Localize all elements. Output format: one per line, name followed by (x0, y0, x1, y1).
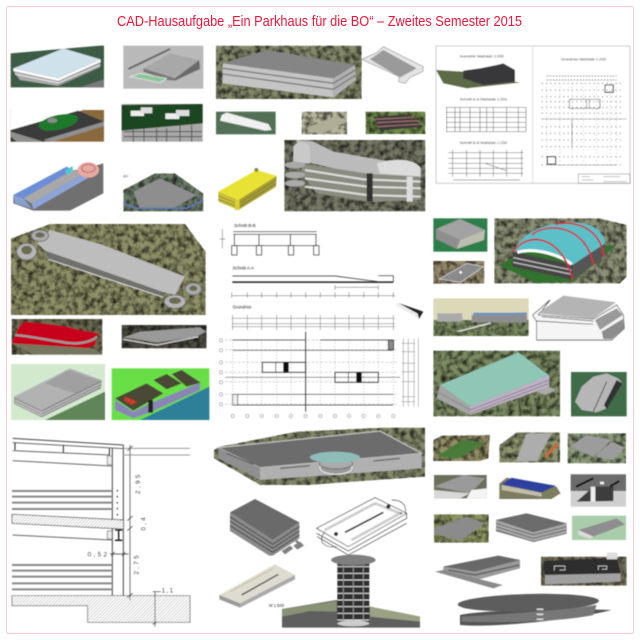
image: yellow building (218, 168, 277, 210)
image: glass dome with red arches (494, 218, 627, 283)
dimension: 0,52: 0,52 (88, 551, 107, 558)
image: grey hall on aerial (434, 514, 489, 543)
heading: section B-B: Schnitt B-B (234, 223, 256, 228)
image: white building on green (216, 112, 276, 134)
image: stacked elliptical decks (457, 592, 612, 626)
image: white and grey terraced building (533, 296, 624, 340)
steel profile (115, 530, 122, 540)
section B-B drawing (220, 229, 319, 255)
image: aerial with pale building (302, 112, 347, 134)
image: red roof building (12, 319, 102, 355)
sheet caption: isometric: Isometrie Maßstab 1:200 (460, 54, 504, 59)
image: green roof on aerial (433, 435, 490, 461)
image: grey building with red roofs (499, 432, 560, 462)
image: dark building on grey (571, 474, 626, 507)
sheet caption: floor plan: Grundriss Maßstab 1:200 (561, 57, 607, 62)
image: grey building on pale green (572, 516, 626, 540)
title block (578, 174, 630, 183)
image: green box model (433, 218, 487, 252)
image: deck with ramp (435, 556, 520, 588)
hatched floor slab (12, 514, 123, 529)
image: small isometric grey slab (362, 47, 423, 83)
image: large curved building with rotundas (284, 140, 425, 211)
image: blue roof building (499, 478, 561, 499)
section A-A drawing (232, 276, 395, 298)
column dots (115, 490, 119, 516)
image: grey roof with white wall (434, 475, 487, 498)
image: blue facade building with pink rotunda (13, 162, 103, 211)
drawing sheet: isometric, sections and floor plan (436, 46, 630, 183)
image: long curved roof on aerial photo (11, 224, 206, 315)
floor plan (225, 315, 418, 412)
image: stacked parking decks (230, 499, 304, 556)
image: green terrain with white blocks above tower (122, 104, 203, 142)
image: flat roof garage with glass rotunda (214, 428, 425, 485)
image: dark roof with white markings (541, 553, 627, 586)
section B drawing (448, 150, 523, 180)
image: small slab on aerial (433, 261, 484, 284)
heading: floor plan: Grundriss (233, 304, 251, 309)
dimension: 0,4: 0,4 (141, 517, 148, 531)
image: oval roof on green (571, 372, 627, 416)
section A drawing (446, 107, 526, 132)
section drawing with dimensions (12, 438, 190, 627)
plan axis markers (219, 339, 395, 418)
dimension: 2,75: 2,75 (133, 555, 140, 575)
hatched foundation (12, 596, 190, 622)
image: round tower with disc roof (282, 555, 420, 628)
image: grey building on light green terrain (11, 364, 105, 420)
image: teal roof garage on aerial (433, 351, 560, 416)
image: building in landscape view (433, 298, 529, 336)
tiny annotations: BO (123, 174, 129, 178)
floor plan drawing (542, 76, 627, 165)
title: CAD-Hausaufgabe „Ein Parkhaus für die BO“ – Zweites Semester 2015 (117, 14, 522, 30)
image: grey model with green deck (123, 46, 203, 89)
dimension lines (110, 445, 161, 627)
image: grey building on aerial plan (123, 173, 203, 211)
technical drawing: sections and floor plan (219, 223, 423, 418)
isometric view of building on terrain (436, 63, 520, 88)
image: large grey parking garage on aerial photo (216, 46, 362, 99)
connection details (107, 456, 112, 539)
image: grey long building on dark ground (122, 325, 207, 348)
sheet caption: section B: Schnitt B-B Maßstab 1:200 (460, 140, 508, 145)
image: wireframe parking plan (317, 498, 407, 555)
image: long beige slab (219, 564, 295, 608)
north arrow (395, 303, 423, 319)
image: dark slab with stripes on aerial (366, 112, 425, 134)
dimension: 1,1: 1,1 (162, 588, 173, 595)
image: open grey multi-storey (496, 513, 567, 542)
scale label: M 1:500 (269, 603, 285, 608)
image: green oval roof on dark slab (11, 110, 104, 142)
heading: section A-A: Schnitt A-A (233, 266, 254, 271)
sheet caption: section A: Schnitt A-A Maßstab 1:200 (460, 97, 508, 102)
image: two grey blocks on aerial (568, 433, 626, 463)
image: white roof parking garage (11, 46, 104, 87)
image: dark building on bright green terrain (112, 368, 209, 420)
dimension: 2,95: 2,95 (135, 474, 142, 494)
